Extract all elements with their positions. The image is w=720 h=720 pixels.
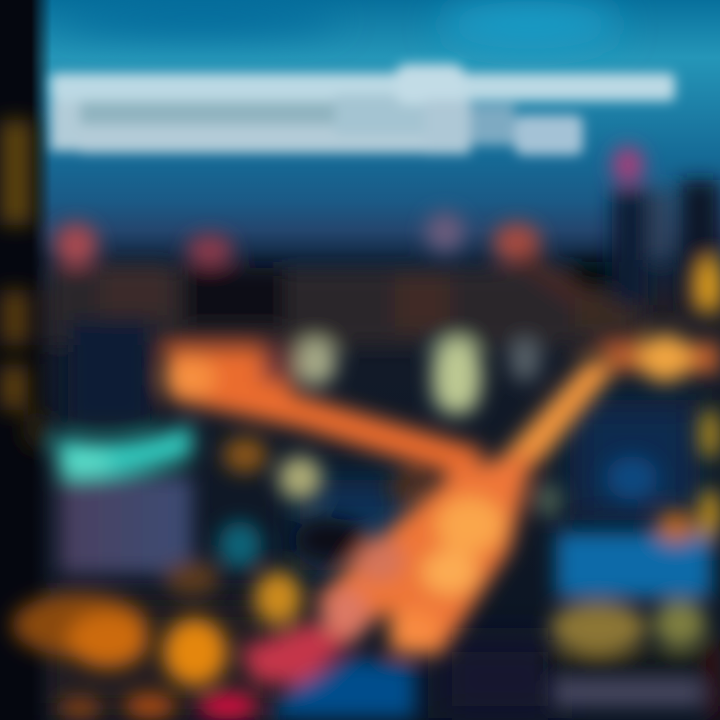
- red and blue streaks at bottom: [58, 622, 415, 719]
- dark left edge base: [0, 0, 52, 720]
- orange road network: [164, 334, 720, 655]
- amber lights on right edge: [698, 258, 720, 540]
- blurred headline text block: [50, 64, 675, 155]
- blue building lower right: [550, 456, 720, 720]
- pale window lights: [278, 335, 562, 518]
- skyline with distant red lights: [50, 146, 720, 345]
- amber patches on left edge: [0, 120, 47, 450]
- teal-lit building: [55, 424, 192, 574]
- lower left glowing lights: [12, 437, 366, 686]
- dark navy tower left: [68, 320, 150, 425]
